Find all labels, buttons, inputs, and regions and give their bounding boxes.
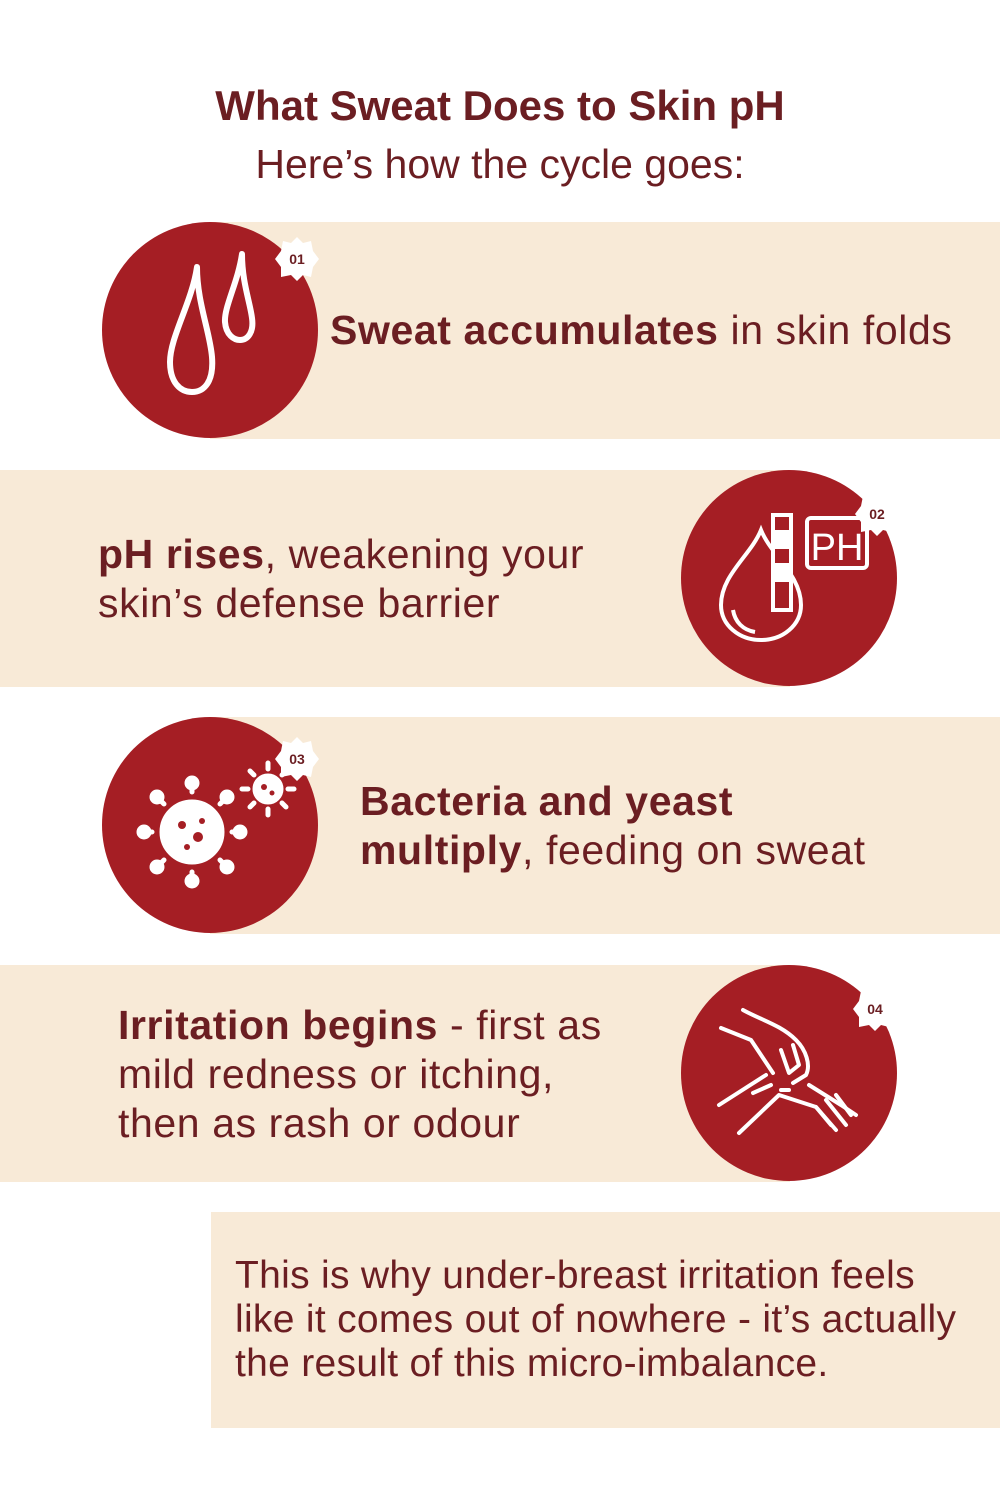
badge 02	[855, 498, 886, 536]
text step 2: pH rises, weakening your	[98, 531, 584, 577]
badge 01	[275, 237, 319, 281]
text step 2	[98, 531, 584, 626]
badge 03	[275, 737, 319, 781]
text step 2: skin’s defense barrier	[98, 580, 500, 626]
callout: conclusion: like it comes out of nowhere - it’s actually	[235, 1298, 956, 1341]
callout: conclusion: This is why under-breast irritation feels	[235, 1254, 915, 1297]
text step 4	[118, 1002, 602, 1146]
subtitle: Here’s how the cycle goes:	[255, 141, 745, 187]
badge 02: 02	[869, 506, 885, 522]
text step 3: multiply, feeding on sweat	[360, 827, 866, 873]
text step 4: Irritation begins - first as	[118, 1002, 602, 1048]
text step 4: mild redness or itching,	[118, 1051, 554, 1097]
text step 1: Sweat accumulates in skin folds	[330, 307, 952, 353]
title: What Sweat Does to Skin pH	[215, 82, 785, 129]
panel: step 2	[0, 470, 897, 687]
callout: conclusion	[211, 1212, 1000, 1428]
callout: conclusion: the result of this micro-imbalance.	[235, 1342, 829, 1385]
panel: step 4	[0, 965, 897, 1182]
text step 3	[360, 778, 866, 873]
text step 3: Bacteria and yeast	[360, 778, 733, 824]
icon: itching hand	[681, 965, 897, 1181]
panel: step 1	[102, 222, 1000, 439]
badge 04: 04	[867, 1001, 883, 1017]
icon: sweat drops	[102, 222, 318, 438]
icon: pH drop: PH	[811, 527, 863, 569]
badge 03: 03	[289, 751, 305, 767]
badge 04	[853, 992, 886, 1031]
icon: bacteria	[102, 717, 318, 933]
text step 4: then as rash or odour	[118, 1100, 520, 1146]
badge 01: 01	[289, 251, 305, 267]
icon: pH drop	[681, 470, 897, 686]
panel: step 3	[102, 717, 1000, 934]
